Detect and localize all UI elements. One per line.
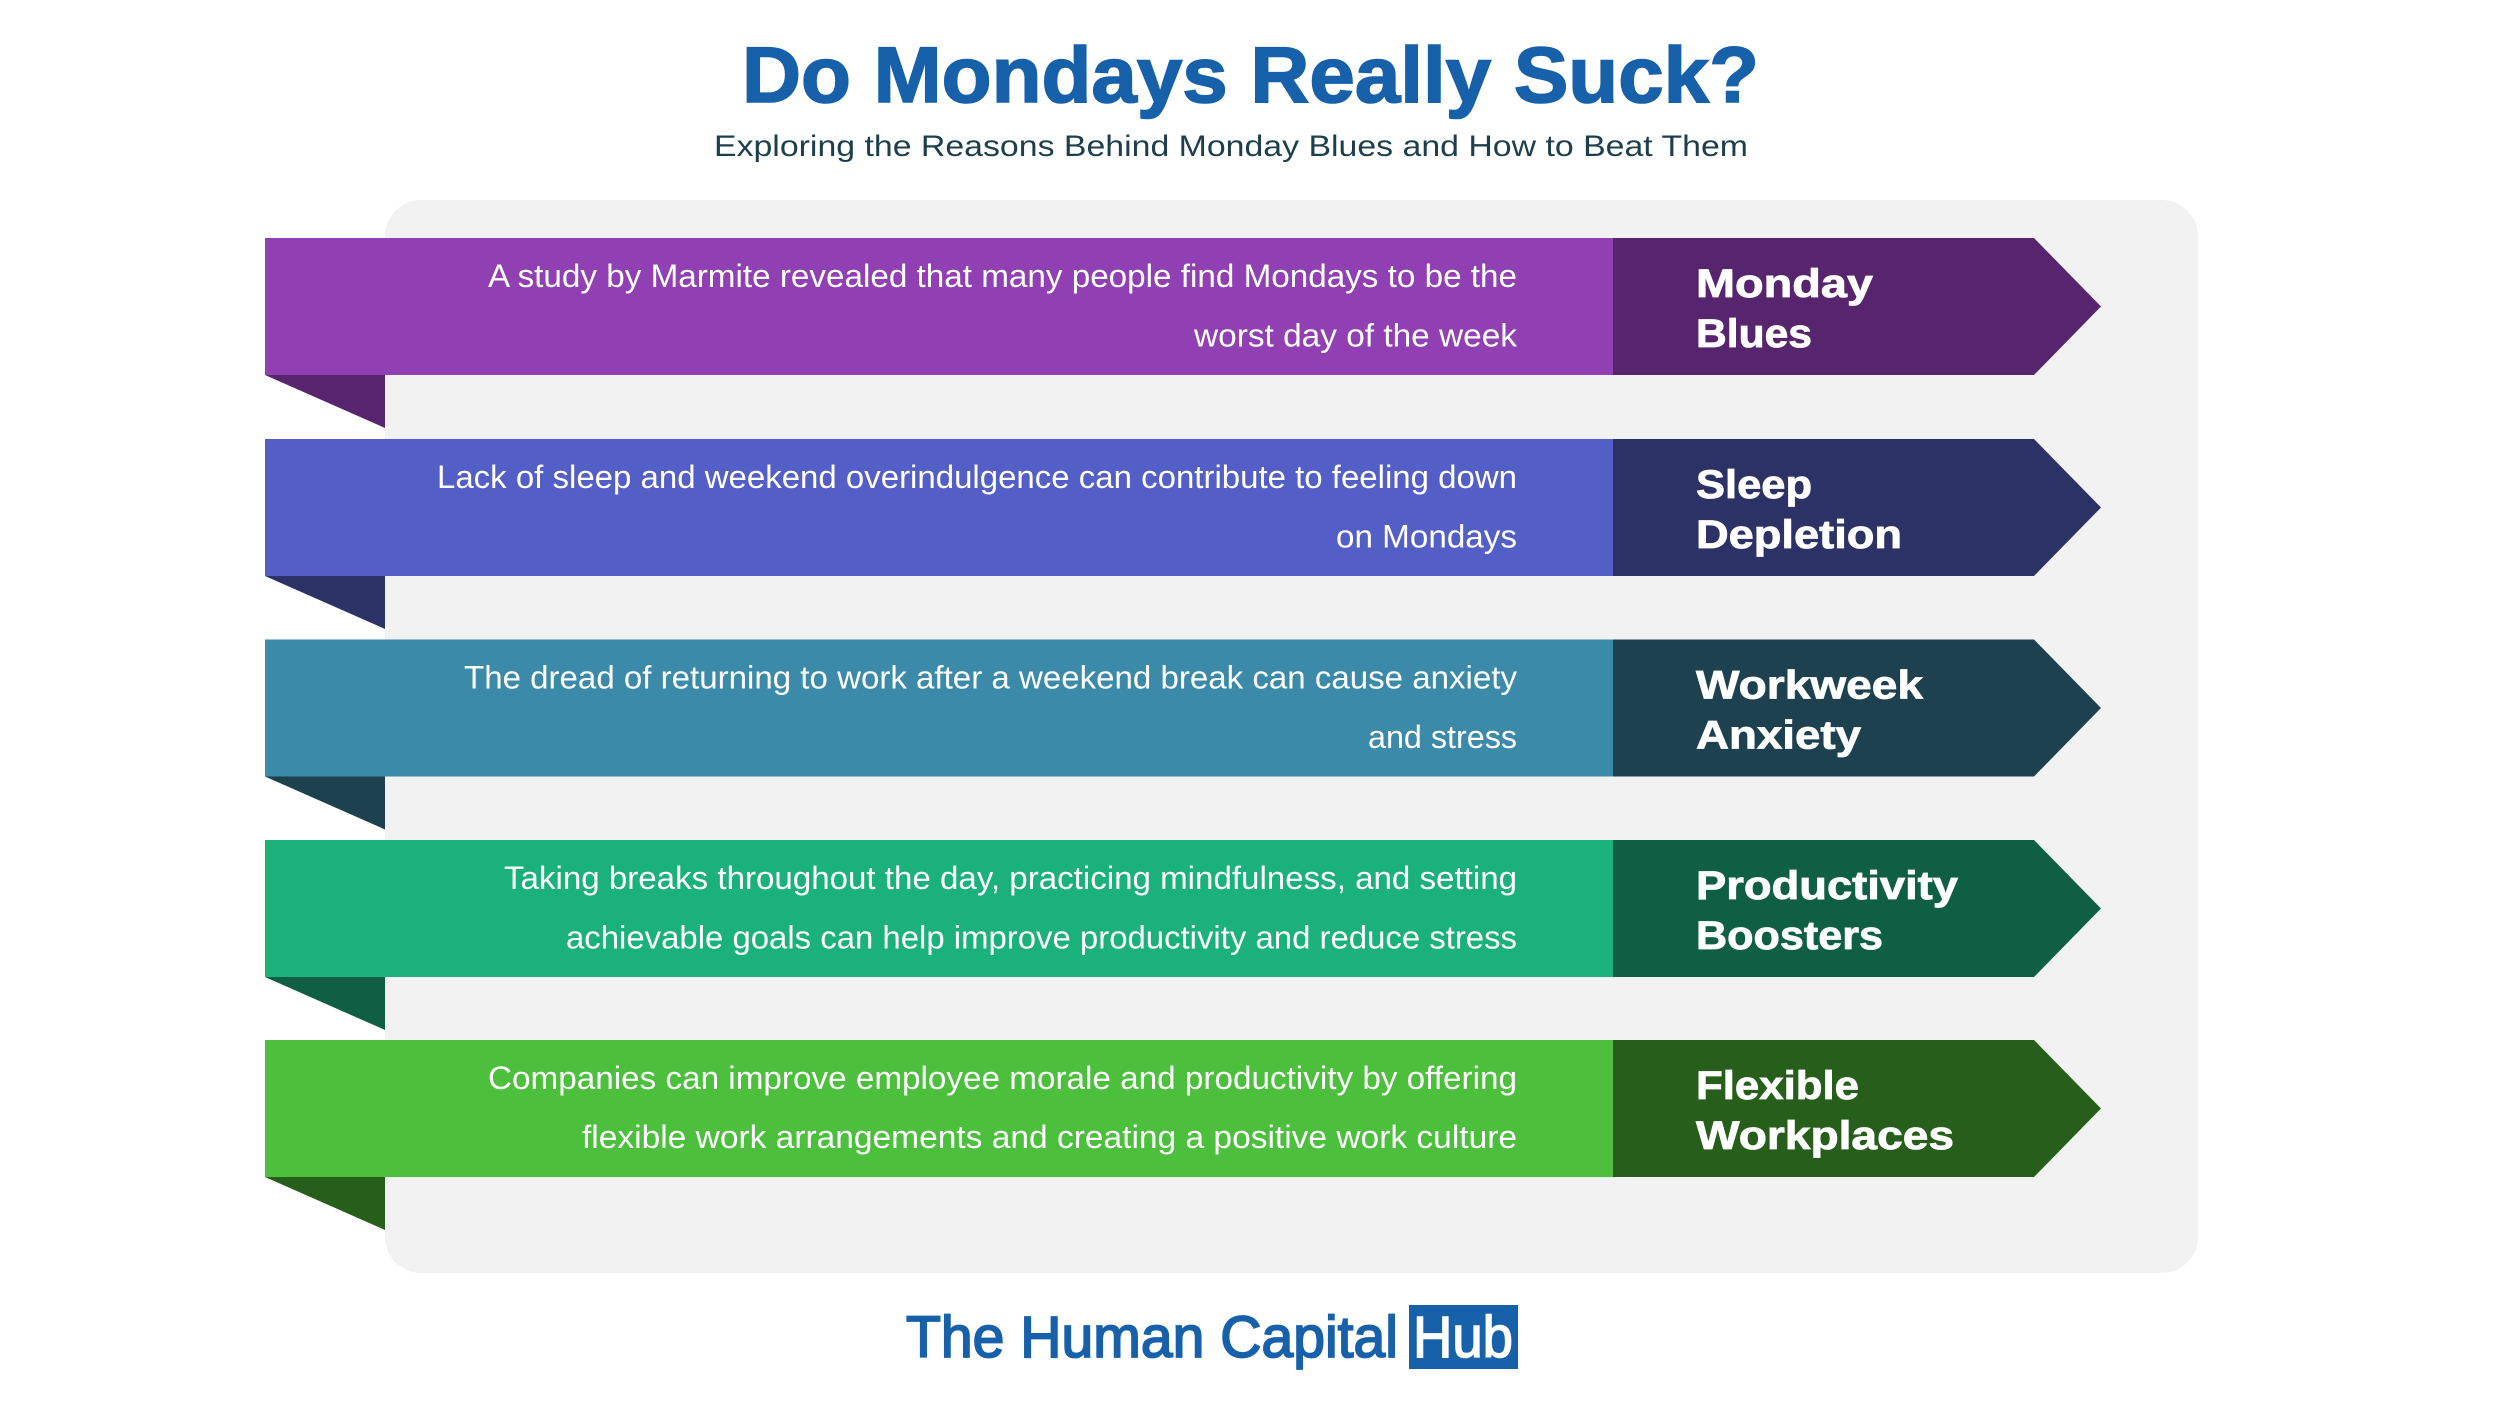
- ribbon: Flexible Workplaces: Flexible: [1696, 1064, 1859, 1108]
- ribbon: Flexible Workplaces: Companies can improve employee morale and productivity by offering: [488, 1060, 1517, 1096]
- ribbon: Flexible Workplaces: [265, 1040, 2101, 1230]
- ribbon: Monday Blues: worst day of the week: [1193, 318, 1518, 354]
- ribbon: Monday Blues: [265, 238, 2101, 428]
- ribbon: Productivity Boosters: [265, 840, 2101, 1030]
- ribbon: Workweek Anxiety: and stress: [1368, 719, 1517, 755]
- ribbon: Workweek Anxiety: [265, 640, 2101, 830]
- ribbon: Productivity Boosters: achievable goals can help improve productivity and reduce stress: [566, 920, 1517, 956]
- ribbon: Monday Blues: Monday: [1696, 262, 1874, 306]
- ribbon: Productivity Boosters: Productivity: [1696, 864, 1959, 908]
- ribbon: Productivity Boosters: Taking breaks throughout the day, practicing mindfulness, and setting: [504, 860, 1517, 896]
- ribbon: Workweek Anxiety: Anxiety: [1696, 714, 1862, 758]
- ribbon: Flexible Workplaces: flexible work arrangements and creating a positive work culture: [582, 1119, 1517, 1155]
- subtitle: Exploring the Reasons Behind Monday Blues and How to Beat Them: [714, 130, 1748, 163]
- ribbon: Workweek Anxiety: Workweek: [1696, 664, 1924, 708]
- ribbon: Workweek Anxiety: The dread of returning to work after a weekend break can cause anxiety: [464, 660, 1517, 696]
- logo: The Human Capital Hub: The Human Capital: [906, 1305, 1398, 1370]
- ribbon: Productivity Boosters: Boosters: [1696, 914, 1883, 958]
- title: Do Mondays Really Suck?: [742, 30, 1759, 119]
- ribbon: Sleep Depletion: Sleep: [1696, 463, 1812, 507]
- ribbon: Sleep Depletion: Depletion: [1696, 513, 1902, 557]
- ribbon: Sleep Depletion: [265, 439, 2101, 629]
- logo: The Human Capital Hub: Hub: [1413, 1305, 1513, 1370]
- ribbon: Monday Blues: Blues: [1696, 312, 1812, 356]
- panel: background: [385, 200, 2198, 1273]
- ribbon: Monday Blues: A study by Marmite revealed that many people find Mondays to be the: [488, 258, 1517, 294]
- ribbon: Sleep Depletion: Lack of sleep and weekend overindulgence can contribute to feeling down: [437, 459, 1517, 495]
- ribbon: Flexible Workplaces: Workplaces: [1696, 1114, 1954, 1158]
- ribbon: Sleep Depletion: on Mondays: [1336, 518, 1517, 554]
